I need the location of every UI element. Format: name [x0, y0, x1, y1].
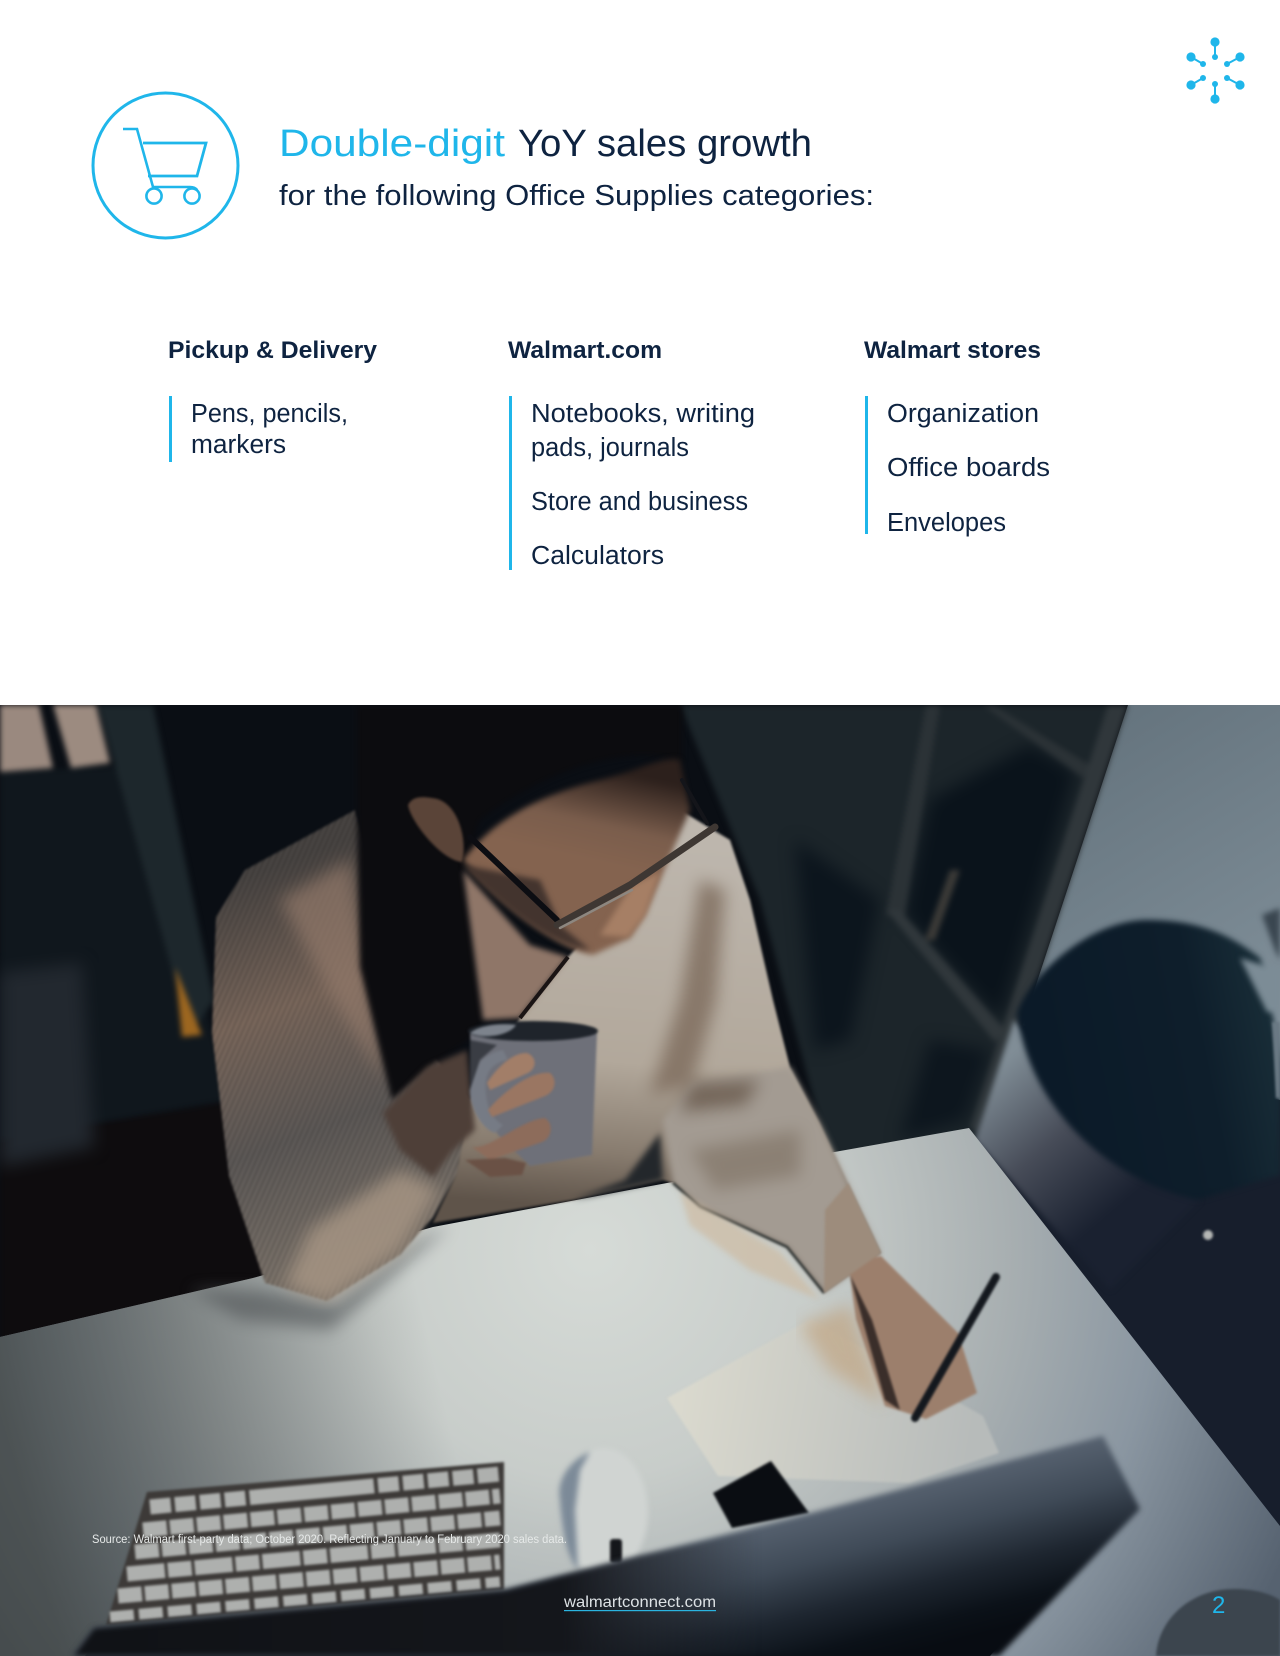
page number: 2	[1212, 1592, 1225, 1619]
list items: Envelopes	[887, 509, 1006, 537]
list items: Store and business	[531, 488, 748, 516]
list items	[887, 400, 1050, 537]
mug	[468, 1021, 598, 1166]
column: Walmart stores	[864, 337, 1050, 537]
column: Pickup & Delivery	[168, 337, 378, 462]
writing hand and pen	[800, 1183, 996, 1419]
photo: woman writing at a desk	[0, 705, 1280, 1656]
round object at lower right	[1156, 1589, 1280, 1656]
heading: Double-digit	[279, 123, 505, 165]
hair	[357, 705, 682, 1100]
warm shadow along sleeve	[680, 1192, 820, 1300]
glasses	[470, 780, 715, 928]
column: Walmart.com	[508, 337, 755, 570]
list item: markers	[191, 431, 286, 459]
notebook	[668, 1346, 998, 1483]
list items: Organization	[887, 400, 1039, 428]
list item: Pens, pencils,	[191, 400, 348, 428]
source note: Source: Walmart first-party data; October 2020. Reflecting January to February 2020 sales data.	[92, 1534, 567, 1546]
list items: Calculators	[531, 542, 664, 570]
column heading: Walmart stores	[864, 337, 1041, 364]
phone	[713, 1461, 809, 1528]
list items: Notebooks, writing	[531, 400, 755, 428]
neck and chest	[463, 870, 568, 1020]
heading	[279, 123, 812, 165]
mouse	[559, 1448, 648, 1576]
footer link: walmartconnect.com	[563, 1594, 716, 1611]
list items: pads, journals	[531, 434, 689, 462]
monitor	[73, 1436, 1140, 1656]
logo: spark network icon	[1186, 37, 1245, 104]
heading: YoY sales growth	[518, 123, 812, 165]
subheading: for the following Office Supplies categories:	[279, 180, 874, 212]
hand back	[383, 1050, 475, 1177]
icon: shopping cart in circle	[93, 93, 238, 238]
arm shadow on desk	[190, 1225, 450, 1330]
lamp	[1017, 908, 1280, 1200]
list item	[191, 400, 348, 459]
accent bar	[169, 396, 172, 462]
list items	[531, 400, 755, 570]
desk	[0, 1128, 1280, 1656]
face	[408, 759, 690, 955]
accent bar	[509, 396, 512, 570]
fingers on mug	[465, 1053, 555, 1177]
accent bar	[865, 396, 868, 534]
keyboard	[106, 1462, 504, 1625]
column heading: Walmart.com	[508, 337, 662, 364]
sweater	[212, 810, 881, 1301]
list items: Office boards	[887, 454, 1050, 482]
column heading: Pickup & Delivery	[168, 337, 378, 364]
